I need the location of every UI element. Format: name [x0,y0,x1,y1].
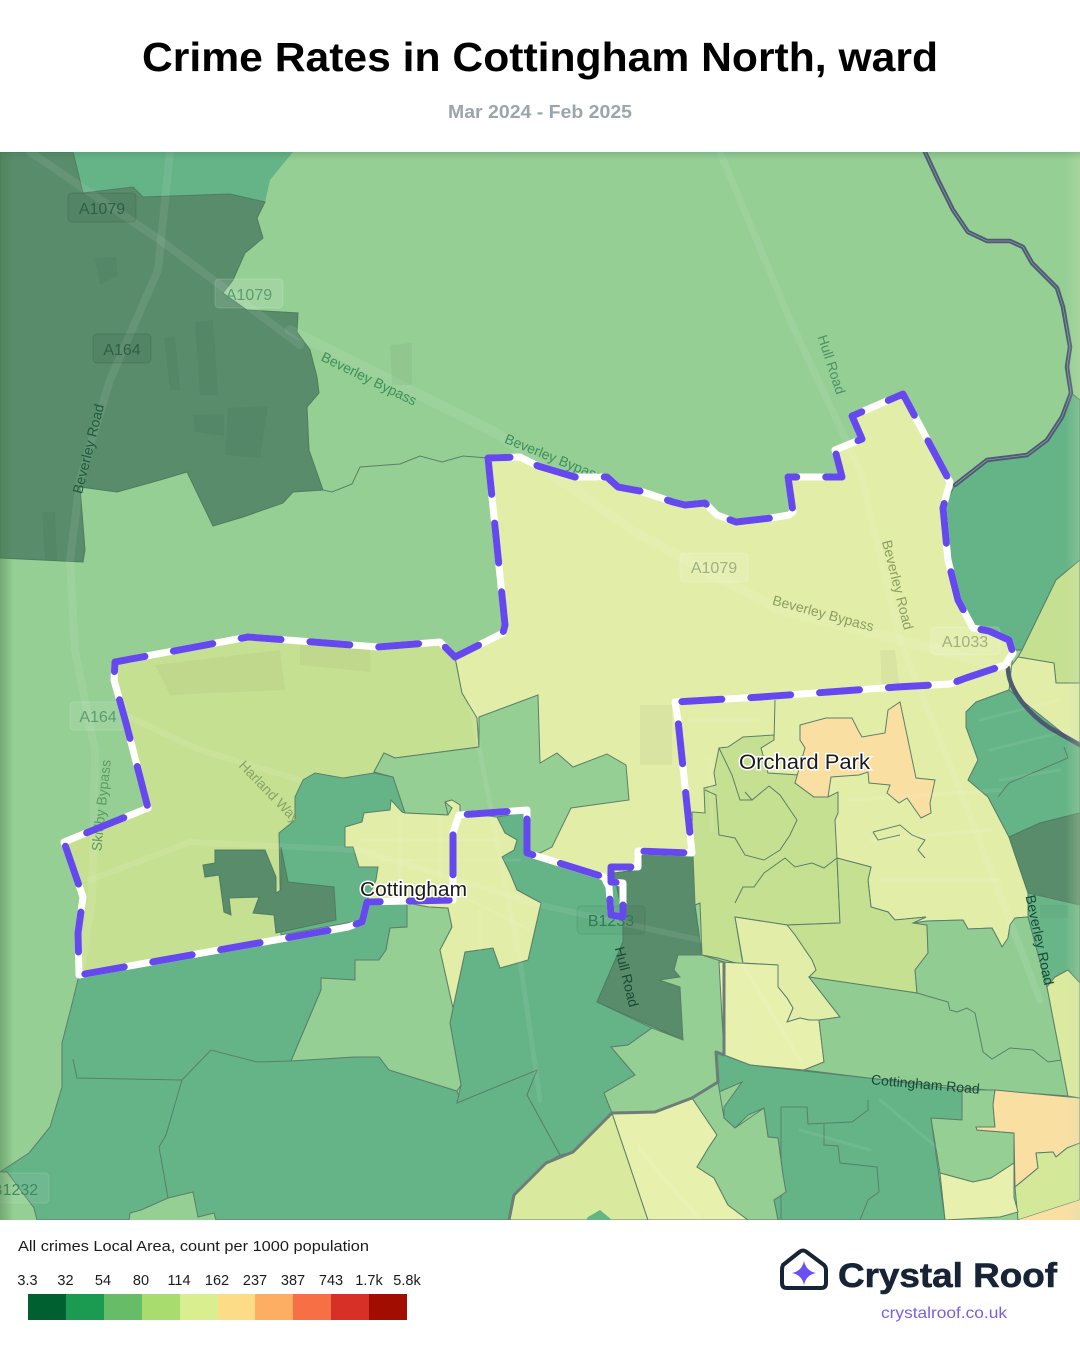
road shield: A1079 centre: A1079 [691,560,737,577]
logo wordmark: Crystal Roof [838,1257,1058,1295]
ward boundary: white line with purple dashes [64,394,1013,975]
road name: Beverley Bypass mid: Beverley Bypass [503,430,605,484]
area: south-east yellow [940,1163,1018,1220]
area: far east lime [1018,560,1080,683]
area: east Beverley Road medium [1028,893,1080,987]
area: south lime [509,1113,648,1220]
place label: Orchard Park: Orchard Park [739,751,871,774]
area: north-east inner outline [998,747,1068,797]
road shield: A1079 second [215,279,283,308]
icon: house with star [782,1250,826,1288]
map vignette edges [0,152,1080,1220]
area: Hull Road dark [597,853,702,1040]
area: east of ward medium zone [943,393,1080,650]
area: small medium south [586,1210,612,1220]
area: south-east lime [1015,1143,1080,1220]
area: south-west inner ward outlines [73,1050,291,1198]
area: west part of ward, lime [64,637,479,975]
area: south-centre inner ward outlines [781,1100,879,1220]
area: far east yellow [1008,657,1080,745]
road shield: A1079 north: A1079 [79,201,125,218]
road name: Hull Road north: Hull Road [815,333,849,396]
road name: Beverley Road centre: Beverley Road [879,538,917,631]
road shield: A1079 centre [680,553,748,582]
road name: Beverley Road east: Beverley Road [1023,893,1057,987]
roads overlay [30,152,1070,1220]
area: south yellow block [719,962,824,1070]
subtitle: date range: Mar 2024 - Feb 2025 [448,102,632,122]
road shield: A164 west: A164 [79,709,117,726]
road shield: B1233: B1233 [588,913,634,930]
thick south boundary [509,962,724,1220]
area: central east inner outline [917,993,1062,1062]
road shield: A1079 second: A1079 [226,287,272,304]
road name: Beverley Bypass east: Beverley Bypass [771,592,876,634]
road shield: A1079 north [68,193,136,222]
legend values: 237 [243,1273,267,1289]
legend [17,1239,421,1320]
area: Orchard Park orange hotspot [795,702,935,818]
logo: Crystal Roof [782,1250,1058,1322]
road names [69,333,1057,1097]
website link: crystalroof.co.uk [881,1305,1008,1322]
area: central east light green [804,917,1068,1096]
area: Cottingham centre yellow [345,800,541,1008]
area: east yellow edge [1047,970,1080,1098]
road labels [0,193,1000,1203]
area: south light green island [291,903,461,1091]
area: north-east medium [966,690,1080,837]
area: central light green [374,695,629,853]
legend values: 387 [281,1273,305,1289]
place label: Cottingham: Cottingham [360,879,467,901]
road shield: B1232 [0,1173,49,1203]
area: south light green [692,1082,786,1220]
rivers [925,152,1080,745]
legend values: 5.8k [393,1273,421,1289]
area: light green east of Hull Road [604,955,724,1113]
road shield: B1233 [577,906,645,934]
area: south-east orange [976,1090,1080,1187]
legend values: 3.3 [17,1273,38,1289]
legend title: All crimes Local Area, count per 1000 population [18,1239,369,1255]
area: lower Orchard Park lime [787,858,928,993]
legend colour scale [28,1294,407,1320]
road shield: A1033 [931,627,1000,655]
road shield: A164 north [93,334,151,363]
road name: Cottingham Road: Cottingham Road [870,1071,980,1097]
area: east dark [1009,813,1080,905]
legend values: 32 [57,1273,74,1289]
road name: Skidby Bypass: Skidby Bypass [88,759,114,852]
area: main ward yellow [455,394,1028,947]
legend values: 80 [133,1273,149,1289]
road shield: A1033: A1033 [942,634,988,651]
area: south yellow [612,1098,748,1220]
legend values [17,1273,421,1289]
area: south-east corner orange [1018,1200,1080,1220]
area: Orchard Park inner ward outlines [705,700,925,903]
field patches [42,257,1068,918]
area: north-west dark zone [0,152,323,562]
legend values: 743 [319,1273,343,1289]
legend values: 1.7k [355,1273,383,1289]
legend values: 54 [95,1273,111,1289]
road name: Beverley Road north-west: Beverley Road [69,402,107,495]
road name: Harland Way: Harland Way [236,757,303,826]
area: south yellow star block [735,917,840,1022]
area: central medium green [450,812,652,1155]
main ward thin boundary north-west link [323,456,488,492]
title: Crime Rates in Cottingham North, ward [142,34,938,80]
road name: Beverley Bypass west: Beverley Bypass [319,348,420,409]
legend values: 162 [205,1273,229,1289]
road name: Hull Road south: Hull Road [612,945,642,1009]
area: Cottingham west medium horseshoe [279,773,407,935]
area: south-centre medium [716,1052,962,1220]
road shield: A164 west [70,702,126,730]
choropleth map [0,152,1080,1220]
road shield: A164 north: A164 [103,342,141,359]
area: Cottingham west dark [203,847,336,933]
legend values: 114 [167,1273,191,1289]
area: Orchard Park lime [692,735,840,965]
area: north-west medium band [73,152,293,202]
area: south-east light green [931,1090,1014,1182]
area: south-west medium green [0,903,560,1220]
